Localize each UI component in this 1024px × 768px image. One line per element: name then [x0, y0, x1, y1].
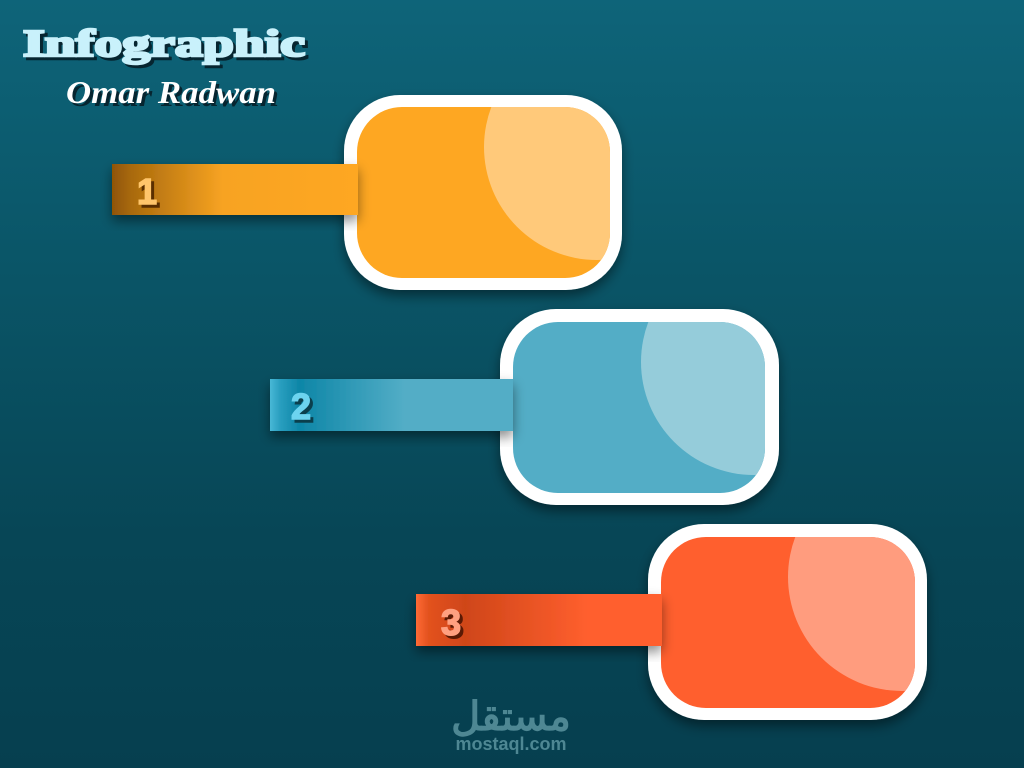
title: Infographic [26, 26, 308, 68]
watermark: مستقل [451, 695, 571, 739]
number 3: 3 [444, 605, 464, 646]
card 2 [495, 309, 784, 516]
step 1 [112, 34, 710, 290]
subtitle: author: Omar Radwan [69, 77, 279, 113]
subtitle: author: Omar Radwan [66, 74, 276, 110]
step 3 [412, 524, 932, 730]
title: Infographic [23, 23, 305, 65]
number 1: 1 [137, 171, 157, 212]
step 2 [270, 249, 867, 505]
number 2: 2 [294, 389, 314, 430]
bar 3 [416, 594, 662, 646]
number 1: 1 [140, 174, 160, 215]
number 3: 3 [441, 602, 461, 643]
card 3 [644, 524, 932, 730]
number 2: 2 [291, 386, 311, 427]
bar 1 [112, 164, 358, 215]
title [23, 23, 308, 68]
watermark: mostaql.com [455, 734, 567, 754]
bar 2 [270, 379, 513, 431]
card 1 [338, 95, 628, 302]
